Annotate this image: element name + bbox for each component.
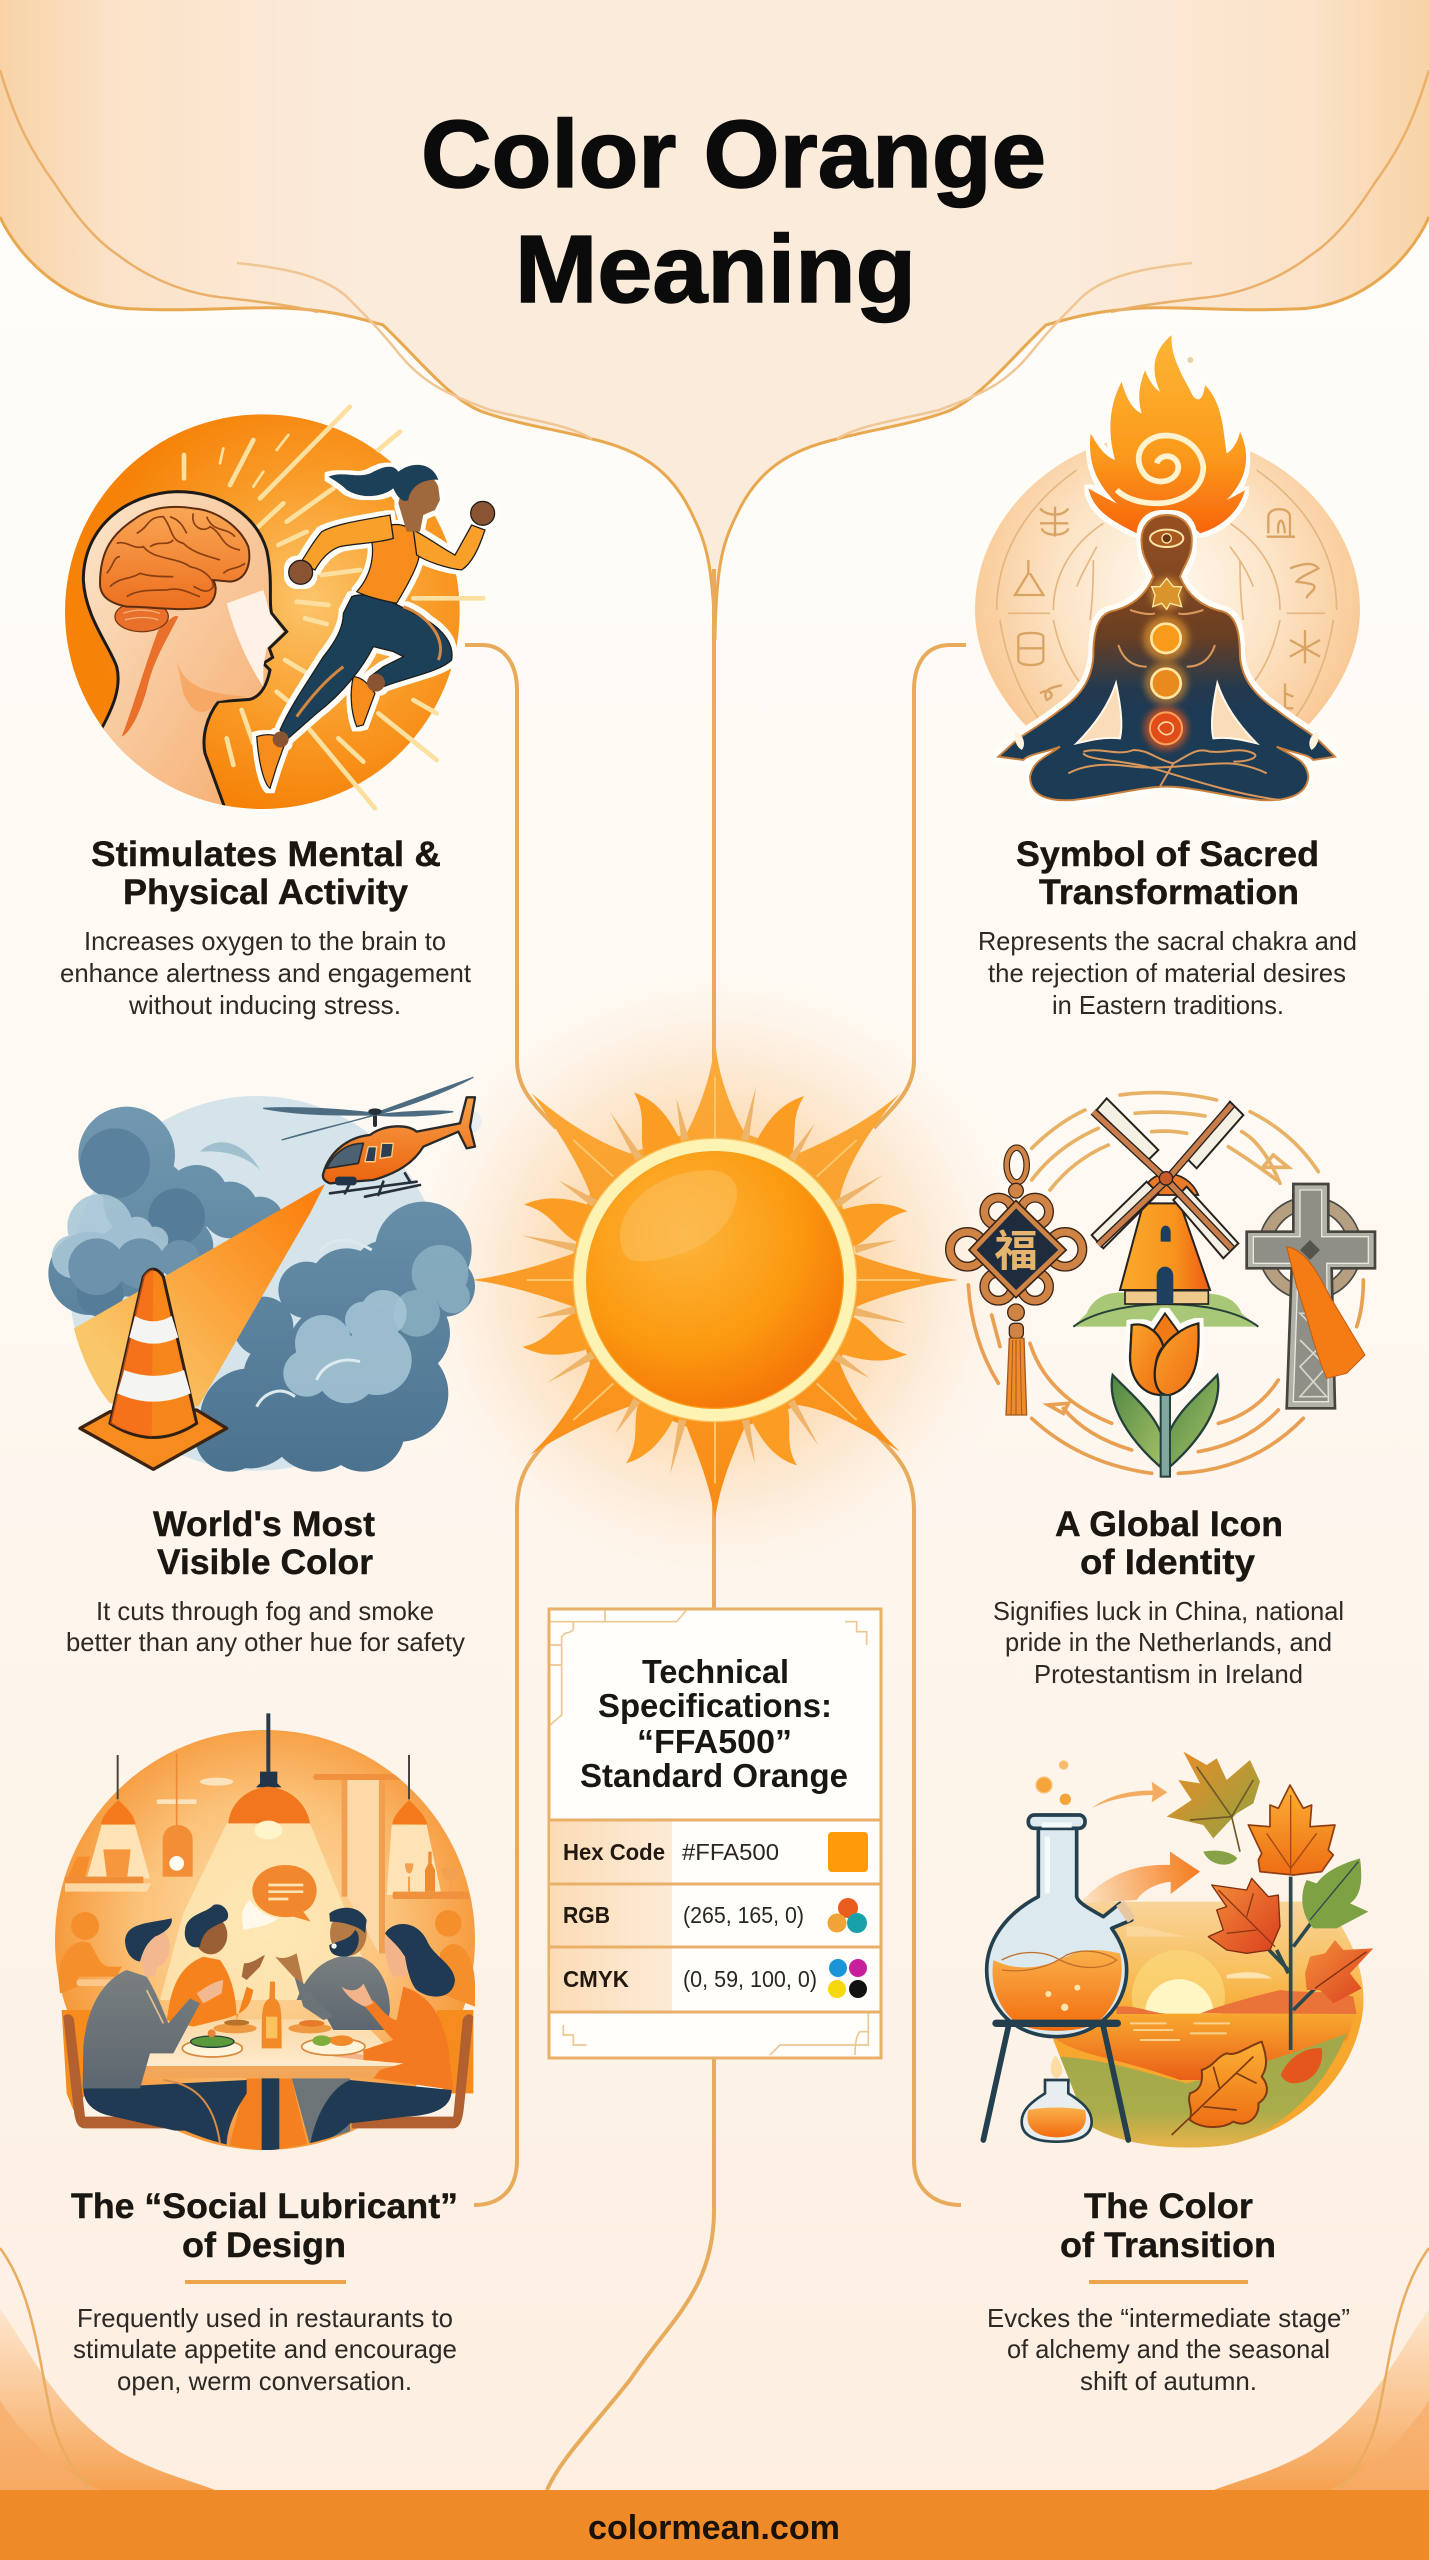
heading: Physical Activity — [123, 873, 409, 912]
description: the rejection of material desires — [988, 958, 1346, 988]
sun glow — [385, 950, 1045, 1610]
description: in Eastern traditions. — [1052, 990, 1284, 1020]
description: Represents the sacral chakra and — [978, 926, 1357, 956]
heading: The Color — [1084, 2187, 1253, 2226]
header backdrop curve — [0, 0, 1429, 640]
description: Protestantism in Ireland — [1034, 1659, 1303, 1689]
connector lines — [465, 569, 966, 2490]
title — [421, 101, 1046, 323]
heading: Visible Color — [157, 1543, 373, 1582]
heading: Transformation — [1039, 873, 1299, 912]
description: It cuts through fog and smoke — [96, 1596, 434, 1626]
description — [73, 2303, 457, 2396]
icon: friends dining under warm lamps — [55, 1713, 475, 2150]
heading — [71, 2187, 458, 2265]
description: stimulate appetite and encourage — [73, 2334, 457, 2364]
panel: most visible color — [48, 1077, 482, 1657]
heading — [91, 835, 441, 912]
heading: Symbol of Sacred — [1016, 835, 1319, 874]
row: RGB: RGB — [563, 1902, 610, 1928]
card title: Specifications: — [598, 1687, 832, 1724]
heading — [1016, 835, 1319, 912]
description: better than any other hue for safety — [66, 1627, 465, 1657]
card title: “FFA500” — [637, 1723, 792, 1760]
footer bar — [0, 2490, 1429, 2560]
description — [993, 1596, 1344, 1689]
icon: meditating figure with flame — [975, 335, 1360, 800]
description: enhance alertness and engagement — [60, 958, 472, 988]
spec table — [549, 1820, 881, 2012]
description: of alchemy and the seasonal — [1007, 2334, 1330, 2364]
card title — [580, 1653, 848, 1794]
description — [66, 1596, 465, 1657]
card title: Standard Orange — [580, 1757, 848, 1794]
heading: The “Social Lubricant” — [71, 2187, 458, 2226]
row: hex code: Hex Code — [563, 1839, 665, 1865]
row: CMYK: (0, 59, 100, 0) — [683, 1966, 817, 1992]
heading — [1060, 2187, 1276, 2265]
card circuit decoration — [550, 1610, 868, 2055]
icon: knot, windmill, tulip and Celtic cross: 福 — [994, 1217, 1038, 1279]
description: open, werm conversation. — [117, 2366, 412, 2396]
title: Meaning — [515, 216, 916, 323]
heading: Stimulates Mental & — [91, 835, 441, 874]
description: Signifies luck in China, national — [993, 1596, 1344, 1626]
panel: social lubricant of design — [55, 1713, 475, 2396]
icon: alchemy flask and autumn sunset — [983, 1752, 1373, 2147]
central sun icon — [472, 1040, 958, 1520]
description: Increases oxygen to the brain to — [84, 926, 446, 956]
heading: A Global Icon — [1055, 1505, 1283, 1544]
row: RGB: (265, 165, 0) — [683, 1902, 804, 1928]
row: RGB — [563, 1898, 867, 1933]
row: CMYK: CMYK — [563, 1966, 629, 1992]
icon: knot, windmill, tulip and Celtic cross — [950, 1093, 1375, 1477]
description: shift of autumn. — [1080, 2366, 1257, 2396]
card title: Technical — [642, 1653, 789, 1690]
description — [978, 926, 1357, 1020]
heading: of Transition — [1060, 2226, 1276, 2265]
heading: of Design — [182, 2226, 346, 2265]
heading — [1055, 1505, 1283, 1582]
heading: of Identity — [1080, 1543, 1256, 1582]
description: Frequently used in restaurants to — [77, 2303, 453, 2333]
description: pride in the Netherlands, and — [1005, 1627, 1332, 1657]
description — [60, 926, 472, 1020]
panel: mental and physical activity — [60, 407, 495, 1020]
heading: World's Most — [153, 1505, 375, 1544]
description — [987, 2303, 1350, 2396]
panel: technical specifications card — [549, 1609, 881, 2058]
icon: brain and runner — [65, 407, 495, 809]
row: hex code — [563, 1832, 868, 1872]
footer bar: colormean.com — [588, 2509, 840, 2547]
panel: the color of transition — [983, 1752, 1373, 2396]
row: CMYK — [563, 1959, 867, 1998]
description: Evckes the “intermediate stage” — [987, 2303, 1350, 2333]
bottom corner waves — [0, 2248, 1429, 2490]
icon: helicopter beam, fog and traffic cone — [48, 1077, 482, 1472]
title: Color Orange — [421, 101, 1046, 208]
description: without inducing stress. — [128, 990, 401, 1020]
heading — [153, 1505, 375, 1582]
panel: sacred transformation — [975, 335, 1360, 1020]
panel: global icon of identity — [950, 1093, 1375, 1689]
row: hex code: #FFA500 — [682, 1839, 779, 1865]
